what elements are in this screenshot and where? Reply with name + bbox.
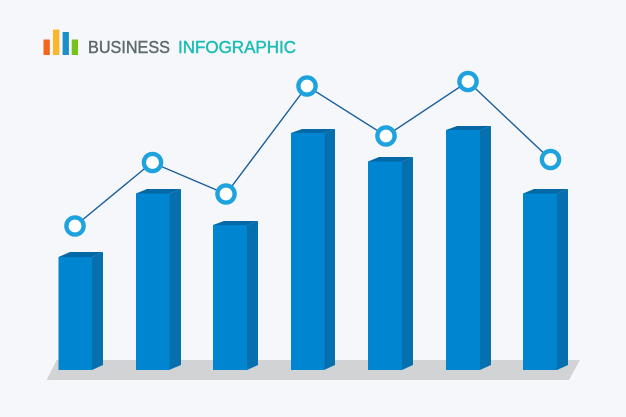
bar 6 xyxy=(446,126,491,370)
title: INFOGRAPHIC xyxy=(178,37,296,57)
logo icon: mini bar chart xyxy=(44,30,78,55)
bar 5 xyxy=(368,157,413,370)
floor shadow xyxy=(46,360,580,380)
title: BUSINESS xyxy=(88,37,170,57)
bar 4 xyxy=(291,129,335,370)
trend line markers xyxy=(66,73,559,235)
trend line xyxy=(75,82,551,226)
bar 7 xyxy=(523,189,568,370)
bar 3 xyxy=(213,221,258,370)
bar 1 xyxy=(58,252,103,370)
bar 2 xyxy=(136,189,181,370)
title xyxy=(88,37,296,57)
bar chart xyxy=(58,126,568,370)
